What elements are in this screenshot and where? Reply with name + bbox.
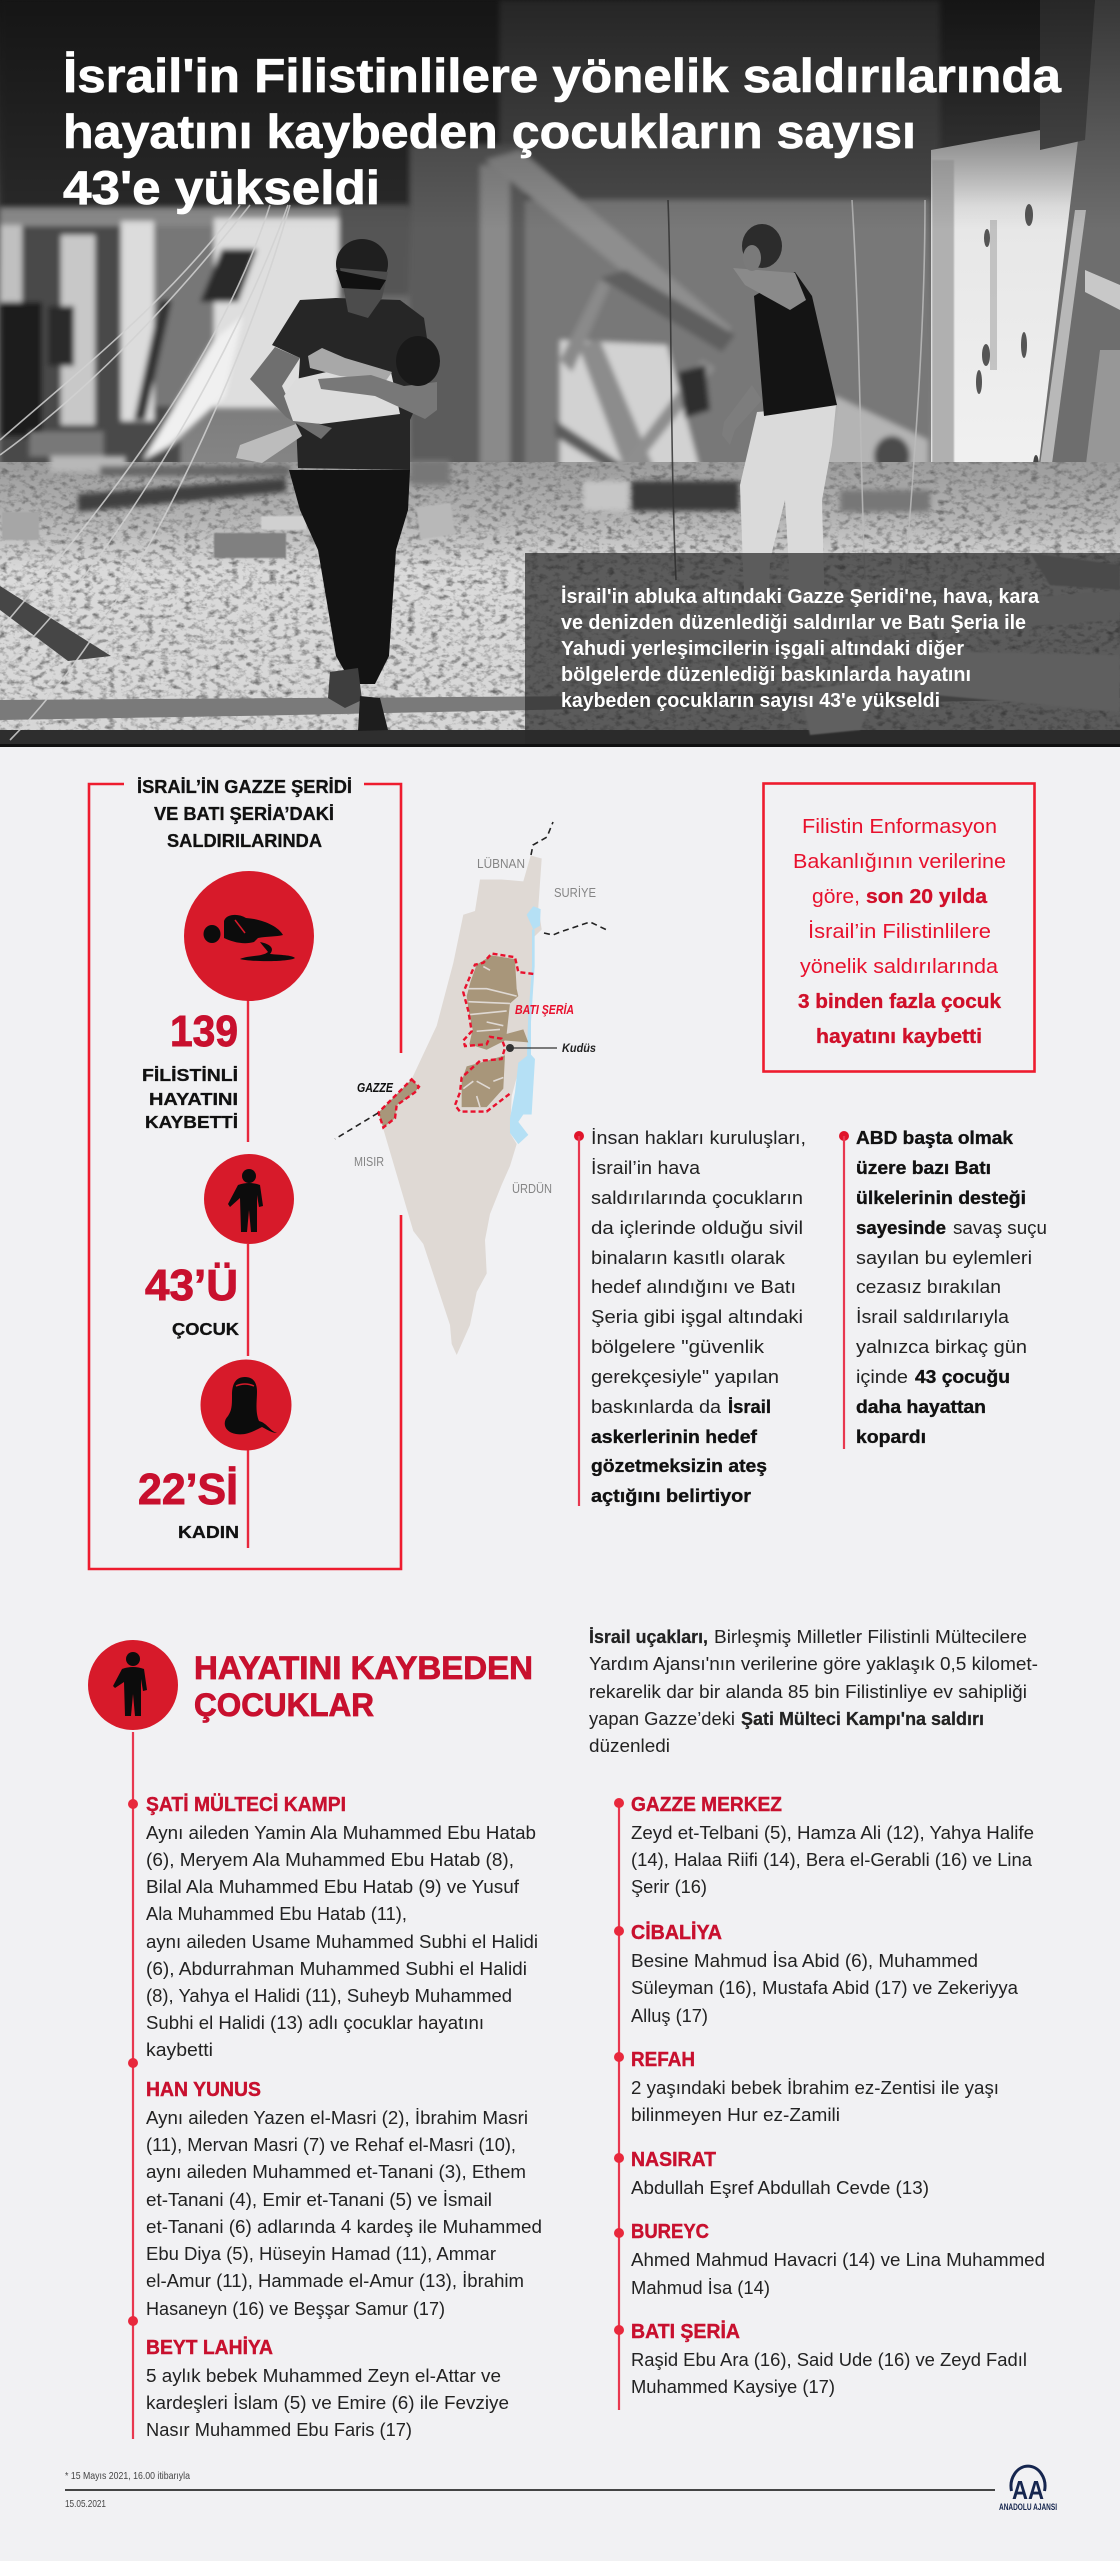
list: Bureij: Mahmud İsa (14) [631, 2277, 770, 2298]
list: Nuseirat: Abdullah Eşref Abdullah Cevde (13) [631, 2177, 929, 2198]
stat: 22'Sİ: 22’Sİ [138, 1465, 238, 1514]
map: labels: SURİYE [554, 885, 596, 900]
text block: US and western support: cezasız bırakılan [856, 1276, 1001, 1297]
top shade [0, 0, 1120, 230]
photo caption [561, 585, 1040, 712]
panel: attack toll frame [89, 777, 401, 1569]
list: Nuseirat: NASIRAT [631, 2148, 716, 2171]
photo caption: İsrail'in abluka altındaki Gazze Şeridi'ne, hava, kara [561, 585, 1040, 608]
section heading: children who lost their lives [88, 1640, 533, 1730]
list: Jabalia: Alluş (17) [631, 2005, 708, 2026]
caption overlay panel [525, 553, 1120, 744]
main man and child [236, 239, 440, 731]
list: Han Yunus: et-Tanani (4), Emir et-Tanani (5) ve İsmail [146, 2189, 492, 2210]
icon: child [88, 1640, 178, 1730]
stat: 139: FİLİSTİNLİ [142, 1065, 238, 1085]
list: Han Yunus: Hasaneyn (16) ve Beşşar Samur (17) [146, 2298, 445, 2319]
photo caption: Yahudi yerleşimcilerin işgali altındaki diğer [561, 638, 964, 660]
list: Han Yunus: (11), Mervan Masri (7) ve Rehaf el-Masri (10), [146, 2134, 516, 2155]
text block: Israeli aircraft intro: Şati Mülteci Kampı'na saldırı [741, 1708, 984, 1729]
heading text: ÇOCUKLAR [194, 1687, 374, 1723]
list: Şati Refugee Camp: Aynı aileden Yamin Ala Muhammed Ebu Hatab [146, 1822, 536, 1843]
list: Bureij [631, 2220, 1045, 2298]
map: labels: ÜRDÜN [512, 1181, 552, 1196]
map: labels: LÜBNAN [477, 856, 525, 871]
text block: Israeli aircraft intro: rekarelik dar bir alanda 85 bin Filistinliye ev sahipliği [589, 1681, 1027, 1702]
stat: 43'Ü: 43’Ü [145, 1261, 238, 1310]
debris under caption panel [620, 553, 1120, 735]
text block: human rights organisations: saldırılarında çocukların [591, 1187, 803, 1208]
text block: human rights organisations: gerekçesiyle" yapılan [591, 1366, 779, 1387]
map: labels: MISIR [354, 1154, 384, 1169]
text block: US and western support: sayesinde [856, 1217, 946, 1238]
text block: US and western support: İsrail saldırılarıyla [856, 1306, 1010, 1327]
list: Gaza centre: Zeyd et-Telbani (5), Hamza Ali (12), Yahya Halife [631, 1822, 1034, 1843]
list: Gaza centre [631, 1793, 1034, 1897]
stat: 139: 139 [170, 1007, 238, 1056]
list: Şati Refugee Camp: Ala Muhammed Ebu Hatab (11), [146, 1903, 407, 1924]
icon: woman [200, 1360, 292, 1450]
list: Rafah [631, 2048, 999, 2125]
text block: human rights organisations: gözetmeksizin ateş [591, 1455, 767, 1476]
text block: US and western support: kopardı [856, 1426, 926, 1447]
list: Gaza centre: Şerir (16) [631, 1876, 707, 1897]
text block: human rights organisations: askerlerinin hedef [591, 1426, 758, 1447]
list: Han Yunus: et-Tanani (6) adlarında 4 kardeş ile Muhammed [146, 2216, 542, 2237]
map: labels: GAZZE [357, 1080, 393, 1095]
callout: 3 thousand children: İsrail’in Filistinlilere [808, 920, 991, 943]
map: dashed borders [455, 954, 533, 1112]
list: West Bank: BATI ŞERİA [631, 2320, 740, 2343]
second man [733, 224, 837, 612]
stat: 22'Sİ [138, 1465, 239, 1542]
list: Beyt Lahiya: Nasır Muhammed Ebu Faris (17) [146, 2419, 412, 2440]
list: Şati Refugee Camp: aynı aileden Usame Muhammed Subhi el Halidi [146, 1931, 538, 1952]
list: Jabalia: Besine Mahmud İsa Abid (6), Muhammed [631, 1950, 978, 1971]
icon: child [204, 1154, 294, 1244]
panel heading: İSRAİL’İN GAZZE ŞERİDİ [137, 777, 352, 797]
text block: human rights organisations [574, 1127, 806, 1506]
logo: Anadolu Ajansı: ANADOLU AJANSI [999, 2502, 1057, 2512]
connector lines [247, 1000, 249, 1548]
map: labels: BATI ŞERİA [515, 1002, 574, 1017]
map: neighbour borders [335, 822, 607, 1139]
list: Rafah: bilinmeyen Hur ez-Zamili [631, 2104, 840, 2125]
heading text [194, 1650, 533, 1723]
list: Beyt Lahiya [146, 2336, 509, 2440]
map: regions in map pixel space [378, 906, 541, 1144]
map: labels [354, 856, 596, 1196]
title: hayatını kaybeden çocukların sayısı [63, 105, 916, 158]
text block: human rights organisations: Şeria gibi işgal altındaki [591, 1306, 803, 1327]
text block: human rights organisations: baskınlarda da [591, 1396, 722, 1417]
stat: 139: HAYATINI [149, 1089, 238, 1109]
text block: US and western support: sayılan bu eylemleri [856, 1247, 1032, 1268]
text block: US and western support: daha hayattan [856, 1396, 986, 1417]
title: 43'e yükseldi [63, 161, 380, 214]
list: Şati Refugee Camp: (6), Meryem Ala Muhammed Ebu Hatab (8), [146, 1849, 514, 1870]
list: Bureij: Ahmed Mahmud Havacri (14) ve Lina Muhammed [631, 2249, 1045, 2270]
logo: Anadolu Ajansı [999, 2466, 1057, 2512]
icon: fallen person [184, 871, 314, 1001]
stat: 139 [142, 1007, 238, 1132]
list: Han Yunus: aynı aileden Muhammed et-Tanani (3), Ethem [146, 2161, 526, 2182]
text block: Israeli aircraft intro: Birleşmiş Milletler Filistinli Mültecilere [714, 1626, 1027, 1647]
footer: * 15 Mayıs 2021, 16.00 itibarıyla [65, 2470, 190, 2482]
text block: human rights organisations: İsrail [728, 1396, 771, 1417]
list: Şati Refugee Camp: ŞATİ MÜLTECİ KAMPI [146, 1793, 346, 1816]
text block: Israeli aircraft intro [589, 1626, 1038, 1756]
text block: human rights organisations: bölgelere "güvenlik [591, 1336, 765, 1357]
text block: human rights organisations: açtığını belirtiyor [591, 1485, 751, 1506]
text block: US and western support: üzere bazı Batı [856, 1157, 991, 1178]
ground with rubble [0, 431, 1120, 747]
map: West Bank [462, 955, 528, 1107]
list: Şati Refugee Camp [146, 1793, 538, 2060]
list: Han Yunus: Aynı aileden Yazen el-Masri (2), İbrahim Masri [146, 2107, 528, 2128]
list: West Bank [631, 2320, 1027, 2397]
list: Gaza centre: (14), Halaa Riifi (14), Bera el-Gerabli (16) ve Lina [631, 1849, 1033, 1870]
list: Beyt Lahiya: kardeşleri İslam (5) ve Emire (6) ile Fevziye [146, 2392, 509, 2413]
title [63, 49, 1062, 214]
list: Şati Refugee Camp: (6), Abdurrahman Muhammed Subhi el Halidi [146, 1958, 527, 1979]
list: Şati Refugee Camp: Bilal Ala Muhammed Ebu Hatab (9) ve Yusuf [146, 1876, 520, 1897]
stat: 43'Ü [145, 1261, 239, 1339]
panel heading [137, 777, 352, 851]
map [335, 822, 607, 1355]
list: Han Yunus: el-Amur (11), Hammade el-Amur (13), İbrahim [146, 2270, 524, 2291]
stat: 22'Sİ: KADIN [178, 1522, 239, 1542]
callout: 3 thousand children [764, 784, 1034, 1072]
callout: 3 thousand children: yönelik saldırılarında [800, 956, 999, 978]
list: West Bank: Muhammed Kaysiye (17) [631, 2376, 835, 2397]
map: Jerusalem marker [506, 1044, 557, 1052]
list: Jabalia: CİBALİYA [631, 1921, 722, 1944]
callout: 3 thousand children: 3 binden fazla çocuk [798, 991, 1002, 1013]
list: Gaza centre: GAZZE MERKEZ [631, 1793, 782, 1816]
callout: 3 thousand children: Bakanlığının verilerine [793, 851, 1006, 873]
list: Jabalia: Süleyman (16), Mustafa Abid (17) ve Zekeriyya [631, 1977, 1019, 1998]
callout: 3 thousand children: son 20 yılda [866, 886, 988, 908]
callout: 3 thousand children: Filistin Enformasyon [802, 816, 997, 838]
stat: 43'Ü: ÇOCUK [172, 1319, 239, 1339]
timeline: left column [128, 1732, 542, 2440]
panel heading: SALDIRILARINDA [167, 831, 322, 851]
list: Nuseirat [631, 2148, 929, 2198]
callout: 3 thousand children: göre, [812, 886, 860, 908]
stat: 139: KAYBETTİ [145, 1112, 238, 1132]
map: land silhouette [378, 856, 542, 1355]
list: Han Yunus: HAN YUNUS [146, 2078, 261, 2101]
list: Şati Refugee Camp: (8), Yahya el Halidi (11), Suheyb Muhammed [146, 1985, 512, 2006]
list: Han Yunus [146, 2078, 542, 2319]
text block: human rights organisations: da içlerinde olduğu sivil [591, 1217, 803, 1238]
list: Bureij: BUREYC [631, 2220, 709, 2243]
text block: Israeli aircraft intro: Yardım Ajansı'nın verilerine göre yaklaşık 0,5 kilomet- [589, 1653, 1038, 1674]
photo caption: kaybeden çocukların sayısı 43'e yükseldi [561, 690, 940, 712]
list: Beyt Lahiya: BEYT LAHİYA [146, 2336, 273, 2359]
panel heading: VE BATI ŞERİA’DAKİ [154, 804, 334, 824]
timeline: right column [614, 1793, 1045, 2410]
callout: 3 thousand children: hayatını kaybetti [816, 1026, 982, 1048]
wires [0, 200, 925, 740]
text block: human rights organisations: binaların kasıtlı olarak [591, 1247, 786, 1268]
text block: Israeli aircraft intro: yapan Gazze’deki [589, 1708, 735, 1729]
title: İsrail'in Filistinlilere yönelik saldırılarında [63, 49, 1062, 102]
list: Beyt Lahiya: 5 aylık bebek Muhammed Zeyn el-Attar ve [146, 2365, 501, 2386]
list: Han Yunus: Ebu Diya (5), Hüseyin Hamad (11), Ammar [146, 2243, 496, 2264]
background: damaged buildings [0, 0, 940, 462]
text block: US and western support: ABD başta olmak [856, 1127, 1014, 1148]
text block: US and western support: ülkelerinin desteği [856, 1187, 1026, 1208]
text block: US and western support [839, 1127, 1047, 1449]
text block: US and western support: yalnızca birkaç gün [856, 1336, 1027, 1357]
text block: US and western support: 43 çocuğu [915, 1366, 1010, 1387]
photo: man carrying a child through rubble [0, 0, 1120, 747]
logo: Anadolu Ajansı: AA [1012, 2475, 1044, 2505]
text block: human rights organisations: hedef alındığını ve Batı [591, 1276, 796, 1297]
list: Şati Refugee Camp: kaybetti [146, 2039, 213, 2060]
text block: human rights organisations: İsrail’in hava [591, 1157, 701, 1178]
footer [65, 2470, 995, 2510]
list: Rafah: REFAH [631, 2048, 695, 2071]
list: Şati Refugee Camp: Subhi el Halidi (13) adlı çocuklar hayatını [146, 2012, 484, 2033]
map: water bodies [510, 906, 541, 1144]
text block: human rights organisations: İnsan hakları kuruluşları, [591, 1127, 806, 1148]
text block: US and western support: savaş suçu [953, 1217, 1047, 1238]
text block: US and western support: içinde [856, 1366, 908, 1387]
map: labels: Kudüs [562, 1041, 596, 1055]
list: West Bank: Raşid Ebu Ara (16), Said Ude (16) ve Zeyd Fadıl [631, 2349, 1027, 2370]
map: seams between West Bank enclaves [463, 966, 517, 1107]
list: Rafah: 2 yaşındaki bebek İbrahim ez-Zentisi ile yaşı [631, 2077, 999, 2098]
text block: Israeli aircraft intro: İsrail uçakları, [589, 1626, 708, 1647]
text block: Israeli aircraft intro: düzenledi [589, 1735, 670, 1756]
map: Gaza strip [378, 1079, 419, 1127]
photo caption: bölgelerde düzenlediği baskınlarda hayatını [561, 664, 971, 686]
right wall with bullet holes [931, 0, 1120, 462]
footer: 15.05.2021 [65, 2498, 106, 2510]
heading text: HAYATINI KAYBEDEN [194, 1650, 533, 1686]
list: Jabalia [631, 1921, 1019, 2026]
photo caption: ve denizden düzenlediği saldırılar ve Batı Şeria ile [561, 612, 1026, 634]
